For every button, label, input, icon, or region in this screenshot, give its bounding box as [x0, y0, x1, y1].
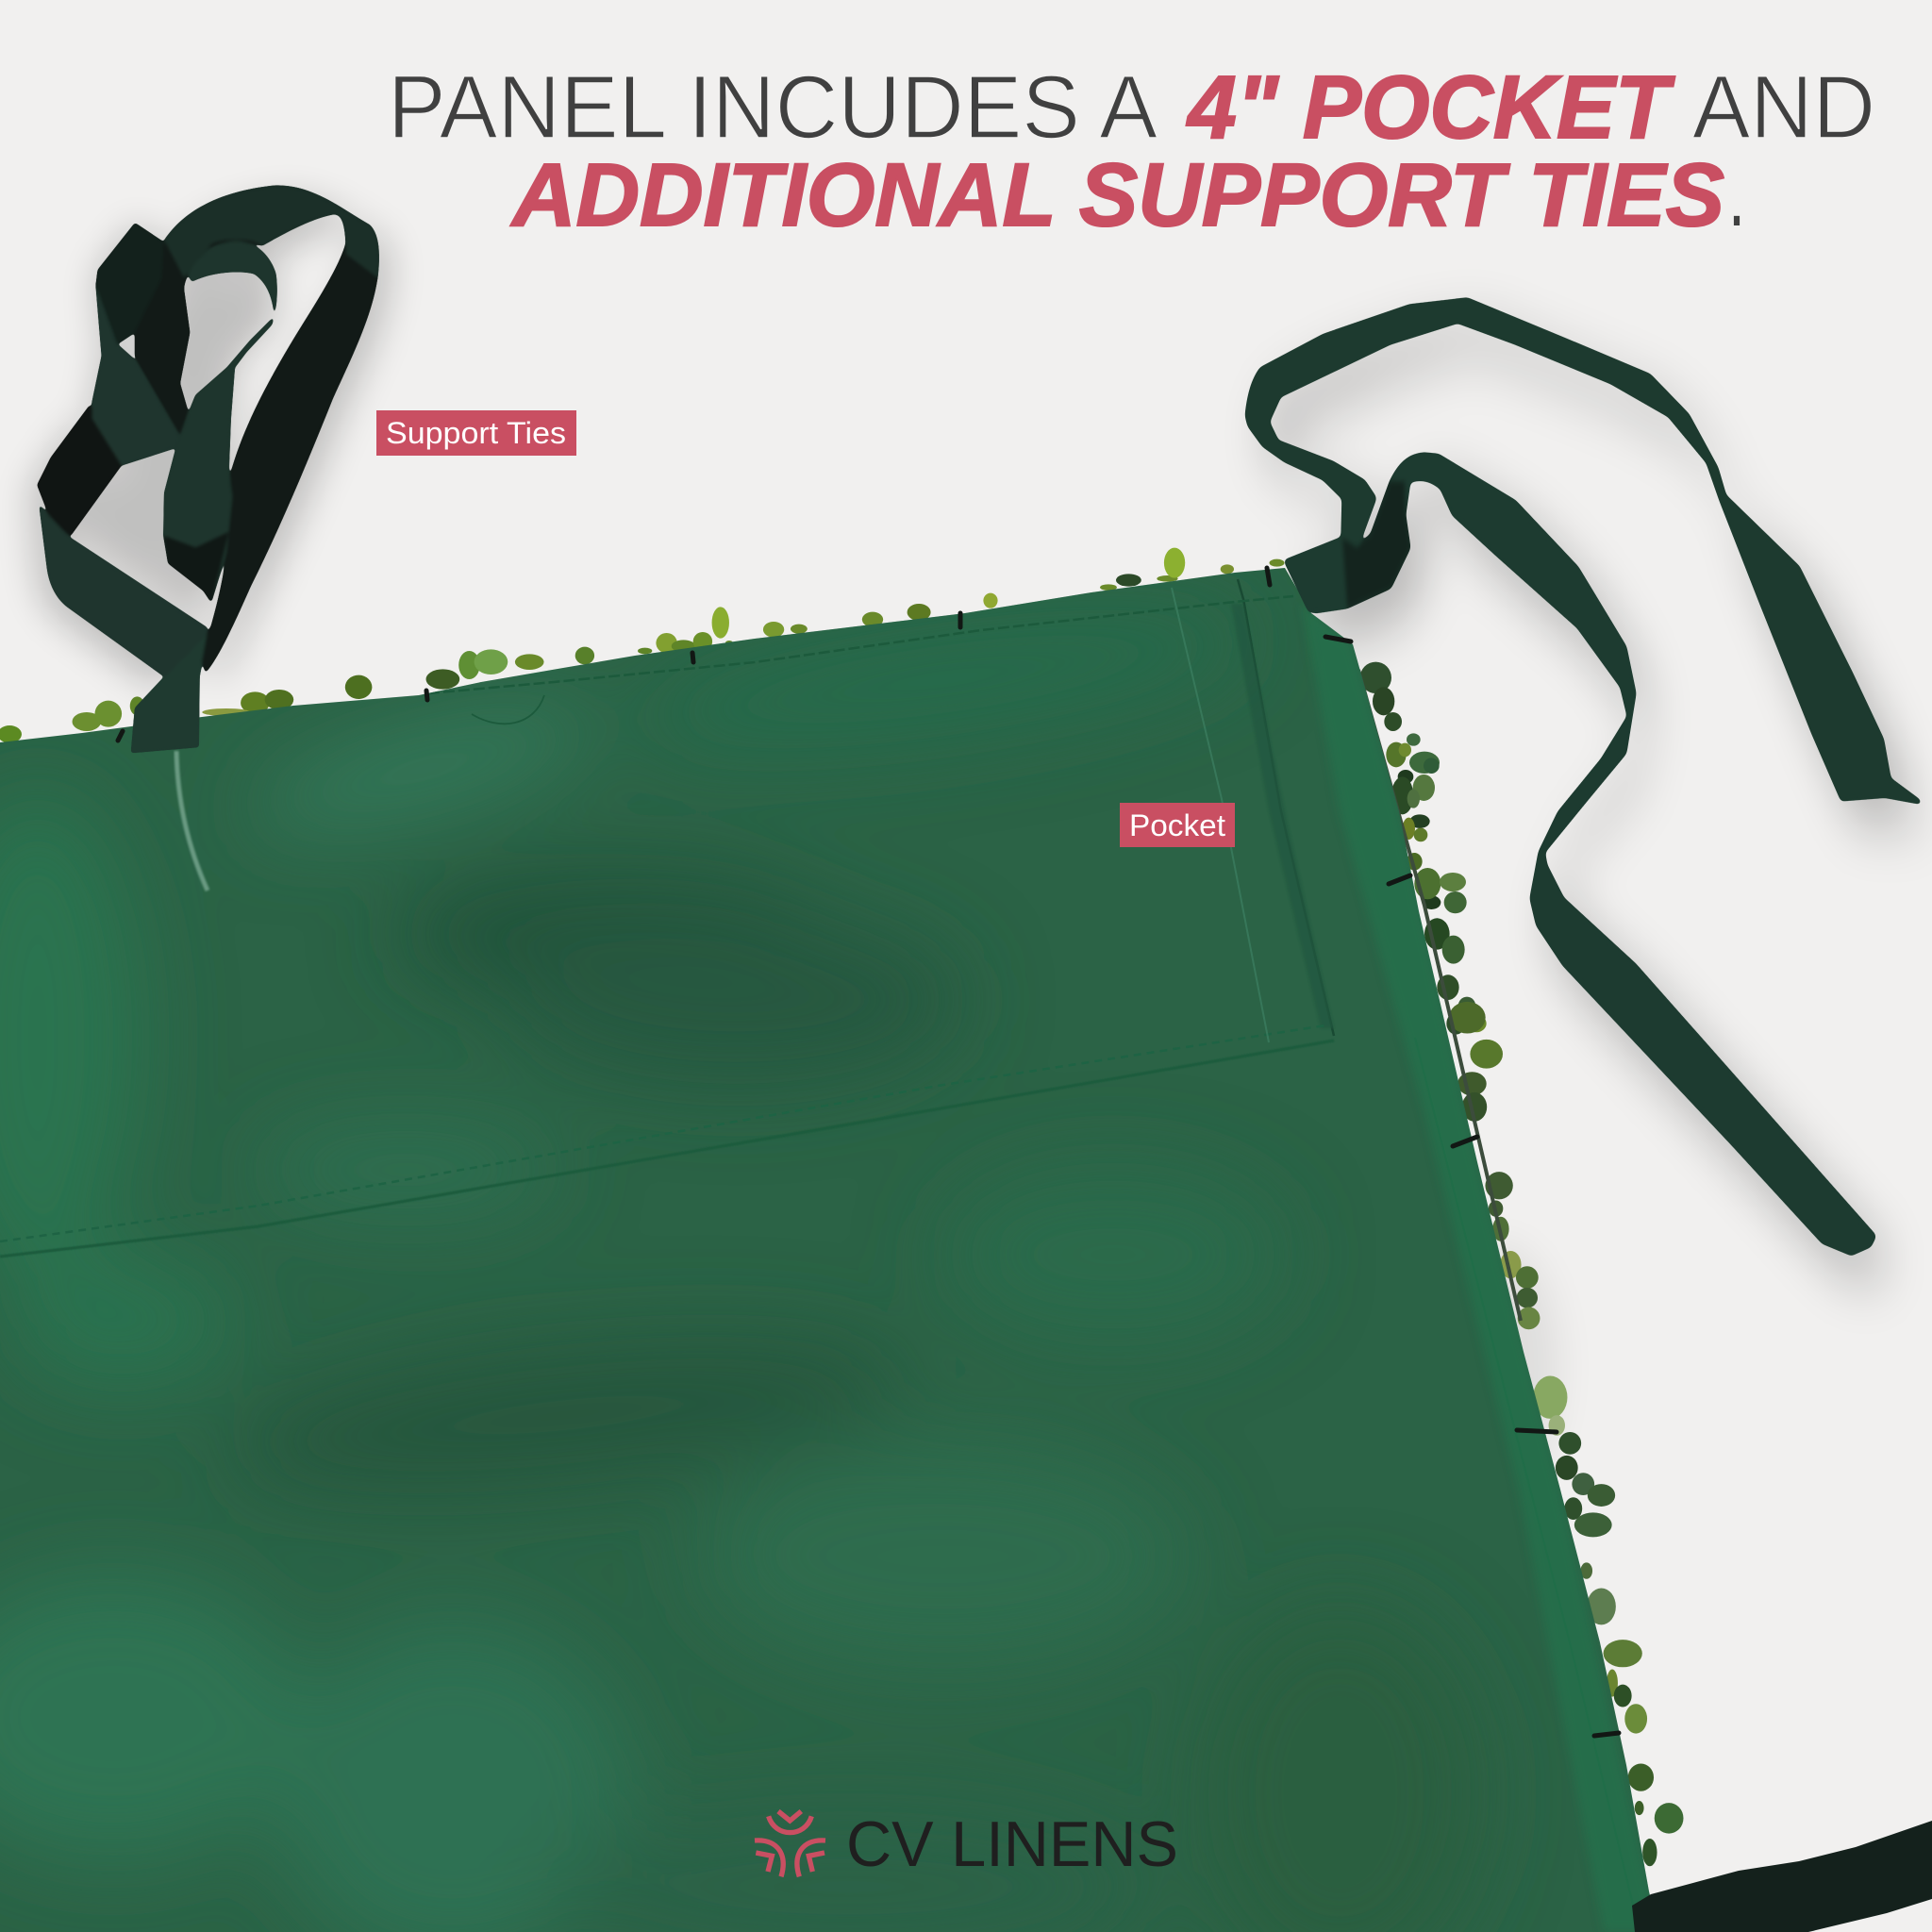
heading line 2: ADDITIONAL SUPPORT TIES: [510, 145, 1724, 245]
logo: CV Linens: [755, 1808, 1178, 1880]
pocket stitching: [0, 1025, 1325, 1241]
pocket fold seam: [0, 1041, 1334, 1257]
heading line 1: [388, 58, 1875, 158]
leaves along lower right edge: [1485, 1172, 1683, 1866]
pale crease streak: [176, 751, 208, 891]
tie shadows: [27, 197, 1932, 1491]
heading: [388, 58, 1875, 245]
leaves along top right edge: [763, 548, 1285, 638]
hem seam: [1415, 1038, 1640, 1932]
pocket crease: [1238, 579, 1334, 1036]
loose thread: [472, 695, 544, 724]
wordmark: CV LINENS: [846, 1808, 1178, 1880]
heading line 1: PANEL INCUDES A: [388, 58, 1158, 158]
leaves along middle right edge: [1449, 1002, 1503, 1122]
callout: support ties: Support Ties: [386, 416, 566, 450]
support tie: left: [37, 186, 379, 753]
panel: green fabric back: [0, 548, 1698, 1932]
leaves behind the top edge: [0, 607, 733, 743]
bottom right tie: [1632, 1821, 1932, 1932]
vertical soft fold: [251, 969, 255, 1228]
heading line 2: .: [1728, 145, 1745, 245]
callout: pocket: Pocket: [1129, 808, 1225, 842]
support tie: right: [1246, 300, 1921, 1255]
knot ties: [118, 568, 1619, 1736]
heading line 1: AND: [1692, 58, 1875, 158]
heading line 1: 4" POCKET: [1186, 58, 1675, 158]
top stitching: [428, 596, 1293, 693]
stem line at the panel edge: [1358, 670, 1521, 1321]
flap vertical seam: [1172, 588, 1269, 1042]
right hem strip: [1302, 604, 1658, 1932]
callout: pocket: [1120, 803, 1235, 847]
callout: support ties: [376, 410, 576, 456]
icon: logo mark: [755, 1811, 825, 1876]
fabric panel: [0, 557, 1698, 1932]
leaves along upper right edge: [1360, 662, 1487, 1035]
